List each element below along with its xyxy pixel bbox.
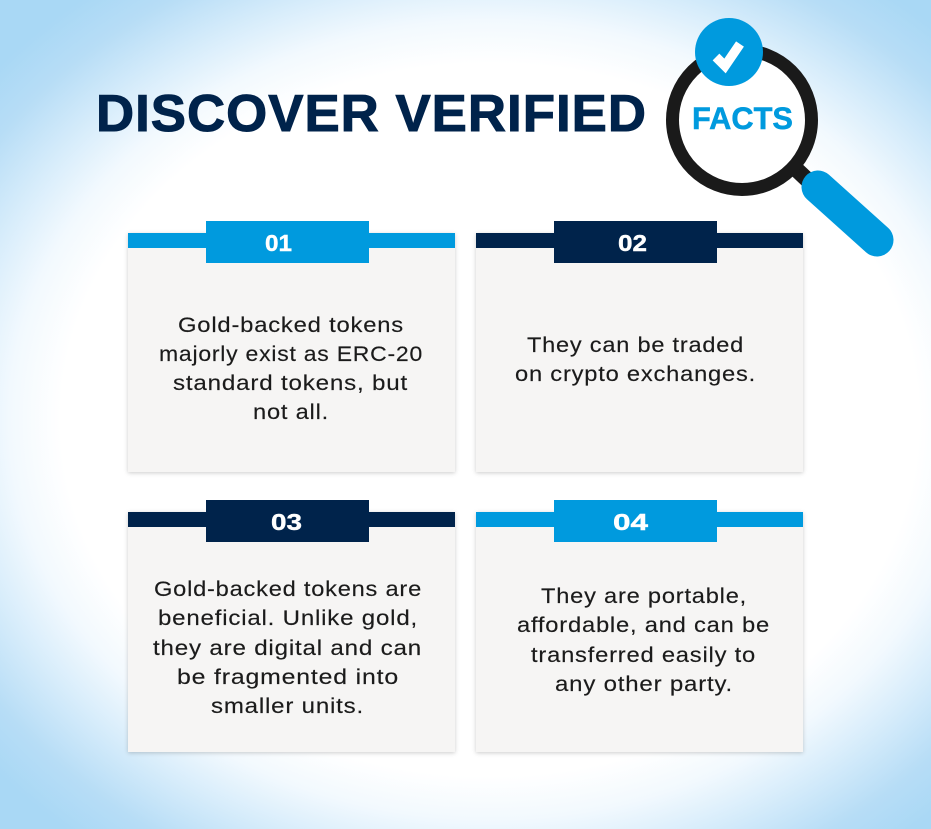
panel: fact 01: standard tokens, but xyxy=(173,372,408,395)
panel: fact 02: 02 xyxy=(618,230,647,256)
panel: fact 01: 01 xyxy=(265,230,292,256)
panel: fact 04: affordable, and can be xyxy=(517,614,770,637)
panel: fact 03 xyxy=(128,500,455,752)
panel: fact 04 xyxy=(476,500,803,752)
panel: fact 04: 04 xyxy=(613,509,648,535)
panel: fact 01 xyxy=(128,221,455,472)
panel: fact 01: majorly exist as ERC-20 xyxy=(159,343,423,366)
panel: fact 03: Gold-backed tokens are xyxy=(154,578,422,601)
panel: fact 03: be fragmented into xyxy=(177,666,399,689)
icon: magnifying glass with check badge xyxy=(672,18,877,240)
panel: fact 02 xyxy=(476,221,803,472)
panel: fact 03: smaller units. xyxy=(211,695,364,718)
panel: fact 02: They can be traded xyxy=(527,334,744,357)
panel: fact 04: transferred easily to xyxy=(531,644,756,667)
panel: fact 03: 03 xyxy=(271,509,302,535)
icon: magnifying glass with check badge: FACTS xyxy=(692,100,793,136)
panel: fact 03: they are digital and can xyxy=(153,637,422,660)
panel: fact 03: beneficial. Unlike gold, xyxy=(158,607,418,630)
panel: fact 02: on crypto exchanges. xyxy=(515,363,756,386)
panel: fact 04: any other party. xyxy=(555,673,733,696)
panel: fact 04: They are portable, xyxy=(541,585,747,608)
title: DISCOVER VERIFIED xyxy=(96,85,647,143)
panel: fact 01: not all. xyxy=(253,401,329,424)
panel: fact 01: Gold-backed tokens xyxy=(178,314,404,337)
